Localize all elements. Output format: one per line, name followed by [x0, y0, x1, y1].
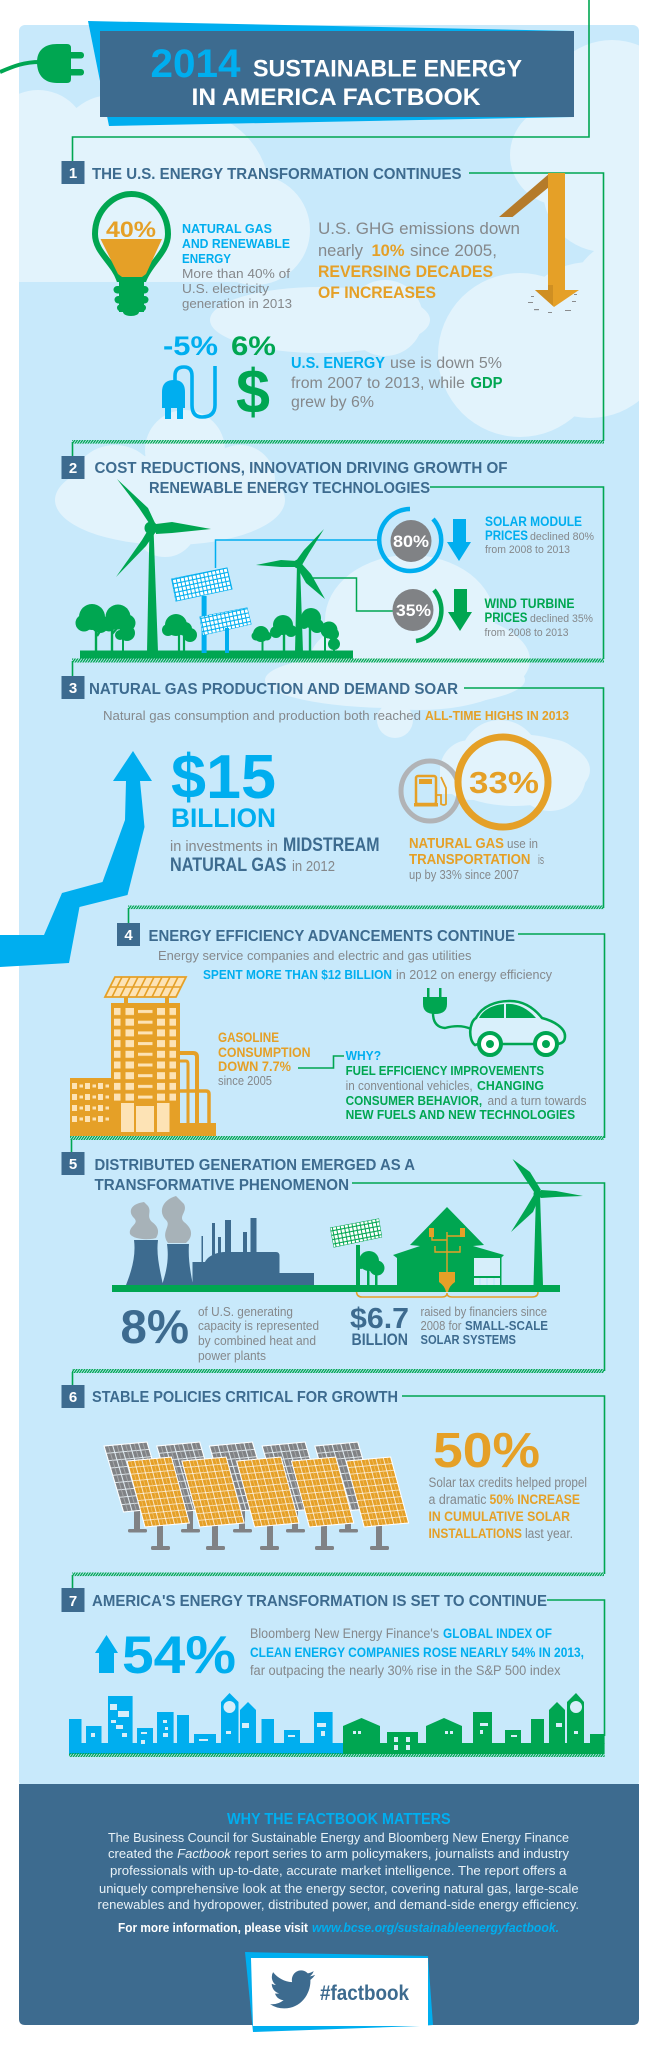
icon: up arrow: [95, 1635, 118, 1673]
arrow down blue: [447, 519, 471, 561]
section 6 frame: [402, 1396, 604, 1574]
stat: 33% ring: 33%: [469, 765, 539, 800]
text: natural gas and renewable: [182, 221, 292, 311]
text: GHG emissions: U.S. GHG emissions down: [318, 219, 520, 238]
cloud behind 33%: [440, 720, 586, 811]
stat labels -5% and 6%: [163, 331, 276, 361]
text: solar module prices: [485, 514, 594, 556]
text: natural gas and renewable: generation in 2013: [182, 296, 292, 311]
section 6 number: 6: [69, 1389, 77, 1406]
ground: [112, 1285, 560, 1292]
stat: $6.7 billion: $6.7: [350, 1303, 409, 1335]
section 2 number: [62, 456, 84, 479]
text: global index: far outpacing the nearly 30% rise in the S&P 500 index: [250, 1663, 561, 1678]
section 3 heading: NATURAL GAS PRODUCTION AND DEMAND SOAR: [89, 681, 458, 698]
text: why: FUEL EFFICIENCY IMPROVEMENTS: [346, 1063, 544, 1078]
section 2 heading: RENEWABLE ENERGY TECHNOLOGIES: [149, 480, 430, 497]
section 2 heading: [94, 460, 508, 497]
section 1 heading: THE U.S. ENERGY TRANSFORMATION CONTINUES: [92, 166, 462, 183]
section 2: [62, 456, 604, 659]
text: why: CHANGING: [477, 1078, 544, 1093]
title banner: 2014: [150, 42, 241, 86]
section 7 number: [62, 1588, 84, 1612]
divider 4: [70, 1139, 72, 1152]
text: gasoline consumption: DOWN 7.7%: [218, 1058, 292, 1074]
stat: 50%: 50%: [433, 1424, 540, 1478]
footer paragraph: uniquely comprehensive look at the energy sector, covering natural gas, large-scale: [99, 1881, 579, 1896]
text: GHG emissions: [318, 219, 520, 302]
icon: downward arrow: [499, 173, 579, 313]
text: solar tax credits: INSTALLATIONS: [428, 1526, 522, 1541]
section 6 number: [62, 1385, 84, 1408]
section 3 number: [62, 676, 84, 699]
icon: gas pump ring: [401, 761, 459, 821]
text: 8% description: of U.S. generating: [198, 1304, 293, 1319]
icon: power plant: [126, 1196, 314, 1285]
solar panels blue: [172, 568, 232, 601]
icon: electric car: [423, 988, 565, 1055]
text: natural gas in transportation: NATURAL GAS: [409, 836, 504, 852]
solar panel array back row: [104, 1442, 377, 1532]
text: solar module prices: declined 80%: [530, 531, 594, 543]
text: solar tax credits: IN CUMULATIVE SOLAR: [428, 1509, 570, 1524]
text: GHG emissions: since 2005,: [410, 241, 497, 260]
title banner: [88, 21, 574, 126]
text: GHG emissions: OF INCREASES: [318, 283, 436, 302]
text: solar tax credits: a dramatic: [428, 1492, 487, 1507]
footer paragraph: created the Factbook report series to arm policymakers, journalists and industry: [108, 1846, 569, 1861]
text: global index: Bloomberg New Energy Finance's: [250, 1626, 439, 1641]
text: gasoline consumption: CONSUMPTION: [218, 1044, 310, 1060]
text: why: [346, 1048, 587, 1122]
text: wind turbine prices: [484, 596, 593, 639]
footer paragraph: The Business Council for Sustainable Energy and Bloomberg New Energy Finance: [108, 1830, 569, 1845]
icon: green house with solar panel and turbine: [330, 1159, 583, 1297]
text: energy use vs GDP: grew by 6%: [291, 394, 374, 411]
text: small-scale solar: raised by financiers since: [420, 1304, 547, 1319]
section 3: [0, 676, 604, 967]
text: natural gas in transportation: use in: [507, 836, 538, 851]
text: energy service companies: SPENT MORE THAN $12 BILLION: [203, 967, 392, 982]
section 5 heading: DISTRIBUTED GENERATION EMERGED AS A: [94, 1157, 415, 1174]
arrow: rising blue arrow: [0, 751, 152, 967]
text: GHG emissions: nearly: [318, 241, 363, 260]
footer link line: [118, 1920, 559, 1935]
footer link line: www.bcse.org/sustainableenergyfactbook.: [312, 1920, 559, 1935]
connector: gasoline to why: [298, 1056, 344, 1068]
text: all-time highs: Natural gas consumption and production both reached: [103, 708, 421, 723]
footer paragraph: renewables and hydropower, distributed power, and demand-side energy efficiency.: [98, 1897, 579, 1912]
divider 5: [72, 1372, 74, 1385]
text: solar module prices: from 2008 to 2013: [485, 544, 570, 556]
section 7 number: 7: [69, 1593, 77, 1610]
divider 1: [72, 442, 74, 456]
decorative clouds: [0, 40, 656, 806]
text: 8% description: power plants: [198, 1348, 266, 1363]
text: natural gas and renewable: U.S. electricity: [182, 281, 270, 296]
text: energy use vs GDP: from 2007 to 2013, while: [291, 375, 465, 392]
text: midstream natural gas: in 2012: [292, 858, 335, 875]
arrow down green: [448, 589, 472, 631]
35% price ring: 35%: [396, 602, 431, 620]
icon: light bulb 40%: 40%: [106, 217, 156, 242]
wind and solar farm illustration: [76, 479, 353, 658]
text: solar tax credits: Solar tax credits helped propel: [428, 1475, 587, 1490]
text: energy service companies: Energy service companies and electric and gas utilities: [158, 948, 472, 963]
text: why: and a turn towards: [488, 1093, 587, 1108]
stat labels -5% and 6%: -5%: [163, 331, 218, 361]
hashtag: #factbook: [320, 1982, 409, 2005]
solar panel array front row: [127, 1457, 409, 1550]
icon: light bulb 40%: [95, 194, 168, 316]
stat: $15 billion: $15: [171, 743, 276, 812]
text: why: WHY?: [346, 1048, 381, 1063]
text: GHG emissions: REVERSING DECADES: [318, 262, 493, 281]
footer link line: For more information, please visit: [118, 1920, 309, 1935]
blue connector: [216, 540, 381, 568]
text: midstream natural gas: [170, 835, 380, 876]
text: solar tax credits: 50% INCREASE: [490, 1492, 580, 1507]
80% price ring: [379, 509, 441, 571]
section 1 frame: [469, 173, 604, 441]
divider 3: [128, 908, 130, 923]
text: natural gas in transportation: [409, 836, 544, 882]
text: why: NEW FUELS AND NEW TECHNOLOGIES: [346, 1107, 575, 1122]
text: global index: [250, 1626, 584, 1678]
text: wind turbine prices: PRICES: [484, 610, 528, 625]
icon: twitter bird: [270, 1970, 315, 2008]
divider 6: [72, 1575, 74, 1588]
text: gasoline consumption: since 2005: [218, 1073, 272, 1088]
section 1 number: [62, 161, 84, 184]
section 3 frame: [464, 688, 604, 908]
stat labels -5% and 6%: 6%: [231, 331, 276, 361]
divider 2: [72, 661, 74, 676]
section 4 heading: ENERGY EFFICIENCY ADVANCEMENTS CONTINUE: [148, 928, 515, 945]
footer paragraph: professionals with up-to-date, accurate market intelligence. The report offers a: [110, 1863, 567, 1878]
stat: $15 billion: BILLION: [171, 803, 276, 833]
stat: 54%: 54%: [122, 1626, 236, 1685]
text: wind turbine prices: from 2008 to 2013: [484, 627, 568, 639]
text: wind turbine prices: WIND TURBINE: [484, 596, 574, 611]
section 6 heading: STABLE POLICIES CRITICAL FOR GROWTH: [92, 1389, 398, 1406]
section 5 frame: [352, 1183, 604, 1371]
text: natural gas and renewable: ENERGY: [182, 251, 231, 266]
section 5 number: [62, 1152, 84, 1175]
section 5: [62, 1152, 604, 1371]
icon: orange building: [70, 977, 216, 1136]
text: natural gas in transportation: is: [538, 852, 544, 867]
section 4 number: 4: [124, 927, 133, 944]
connector: title to section 1: [72, 0, 589, 162]
text: all-time highs: ALL-TIME HIGHS IN 2013: [425, 708, 569, 723]
text: gasoline consumption: [218, 1029, 310, 1088]
stat: 33% ring: [458, 737, 548, 827]
text: natural gas in transportation: up by 33% since 2007: [409, 867, 519, 882]
text: natural gas in transportation: TRANSPORTATION: [409, 852, 530, 868]
icon: blue plug: [162, 366, 215, 419]
icon: dollar sign: $: [236, 358, 270, 427]
text: energy use vs GDP: [291, 355, 502, 411]
text: energy use vs GDP: U.S. ENERGY: [291, 355, 386, 372]
text: natural gas and renewable: NATURAL GAS: [182, 221, 272, 236]
title top-left plug connector: [0, 44, 84, 83]
title banner: SUSTAINABLE ENERGY: [253, 56, 522, 82]
text: why: CONSUMER BEHAVIOR,: [346, 1093, 482, 1108]
section 2 frame: [430, 487, 604, 659]
city skyline blue: [69, 1693, 343, 1754]
section 5 heading: [94, 1157, 415, 1194]
text: all-time highs: [103, 708, 569, 723]
text: wind turbine prices: declined 35%: [530, 613, 593, 625]
text: 8% description: capacity is represented: [198, 1318, 319, 1333]
stat: $6.7 billion: BILLION: [352, 1330, 408, 1349]
80% price ring: 80%: [393, 533, 429, 551]
section 4 number: [117, 923, 140, 946]
section 6: [62, 1385, 604, 1574]
text: solar module prices: SOLAR MODULE: [485, 514, 582, 529]
text: solar tax credits: last year.: [525, 1526, 573, 1541]
section 7 heading: AMERICA'S ENERGY TRANSFORMATION IS SET TO CONTINUE: [92, 1593, 547, 1610]
text: solar module prices: PRICES: [485, 528, 528, 543]
section 1: [62, 161, 604, 441]
city skyline green: [343, 1693, 605, 1754]
text: small-scale solar: [420, 1304, 548, 1347]
text: natural gas and renewable: AND RENEWABLE: [182, 236, 290, 251]
stat: $6.7 billion: [350, 1303, 409, 1349]
text: GHG emissions: 10%: [372, 241, 404, 260]
footer panel: [19, 1784, 639, 2032]
text: solar tax credits: [428, 1475, 587, 1541]
section 7: [62, 1588, 605, 1757]
section 4 frame: [518, 934, 604, 1138]
stat: 8%: 8%: [120, 1300, 189, 1353]
text: small-scale solar: SMALL-SCALE: [465, 1318, 548, 1333]
section 5 number: 5: [69, 1156, 77, 1173]
text: energy service companies: [158, 948, 552, 982]
footer paragraph: [98, 1830, 579, 1912]
text: 8% description: by combined heat and: [198, 1333, 316, 1348]
section 7 frame: [547, 1600, 604, 1736]
35% price ring: [392, 589, 441, 641]
section 5 heading: TRANSFORMATIVE PHENOMENON: [94, 1177, 349, 1194]
section 3 number: 3: [69, 680, 77, 697]
text: small-scale solar: SOLAR SYSTEMS: [420, 1332, 516, 1347]
section 2 number: 2: [69, 460, 77, 477]
green connector: [312, 578, 393, 611]
trees: [76, 604, 340, 651]
text: global index: CLEAN ENERGY COMPANIES ROSE NEARLY 54% IN 2013,: [250, 1645, 584, 1660]
text: energy service companies: in 2012 on energy efficiency: [396, 967, 552, 982]
skyline hatched ground: [69, 1753, 605, 1757]
text: energy use vs GDP: GDP: [470, 375, 502, 392]
section 4: [70, 923, 604, 1138]
text: midstream natural gas: in investments in: [170, 838, 278, 855]
section 1 number: 1: [69, 165, 77, 182]
title banner: IN AMERICA FACTBOOK: [192, 84, 481, 111]
text: why: in conventional vehicles,: [346, 1078, 473, 1093]
text: midstream natural gas: NATURAL GAS: [170, 855, 286, 876]
footer heading: WHY THE FACTBOOK MATTERS: [227, 1811, 451, 1828]
section 2 heading: COST REDUCTIONS, INNOVATION DRIVING GROWTH OF: [94, 460, 508, 477]
text: 8% description: [198, 1304, 319, 1363]
twitter hashtag box: [245, 1952, 433, 2032]
text: global index: GLOBAL INDEX OF: [443, 1626, 552, 1641]
text: energy use vs GDP: use is down 5%: [390, 355, 502, 372]
text: midstream natural gas: MIDSTREAM: [283, 835, 380, 856]
text: natural gas and renewable: More than 40% of: [182, 266, 290, 281]
text: small-scale solar: 2008 for: [420, 1318, 462, 1333]
text: gasoline consumption: GASOLINE: [218, 1029, 279, 1045]
